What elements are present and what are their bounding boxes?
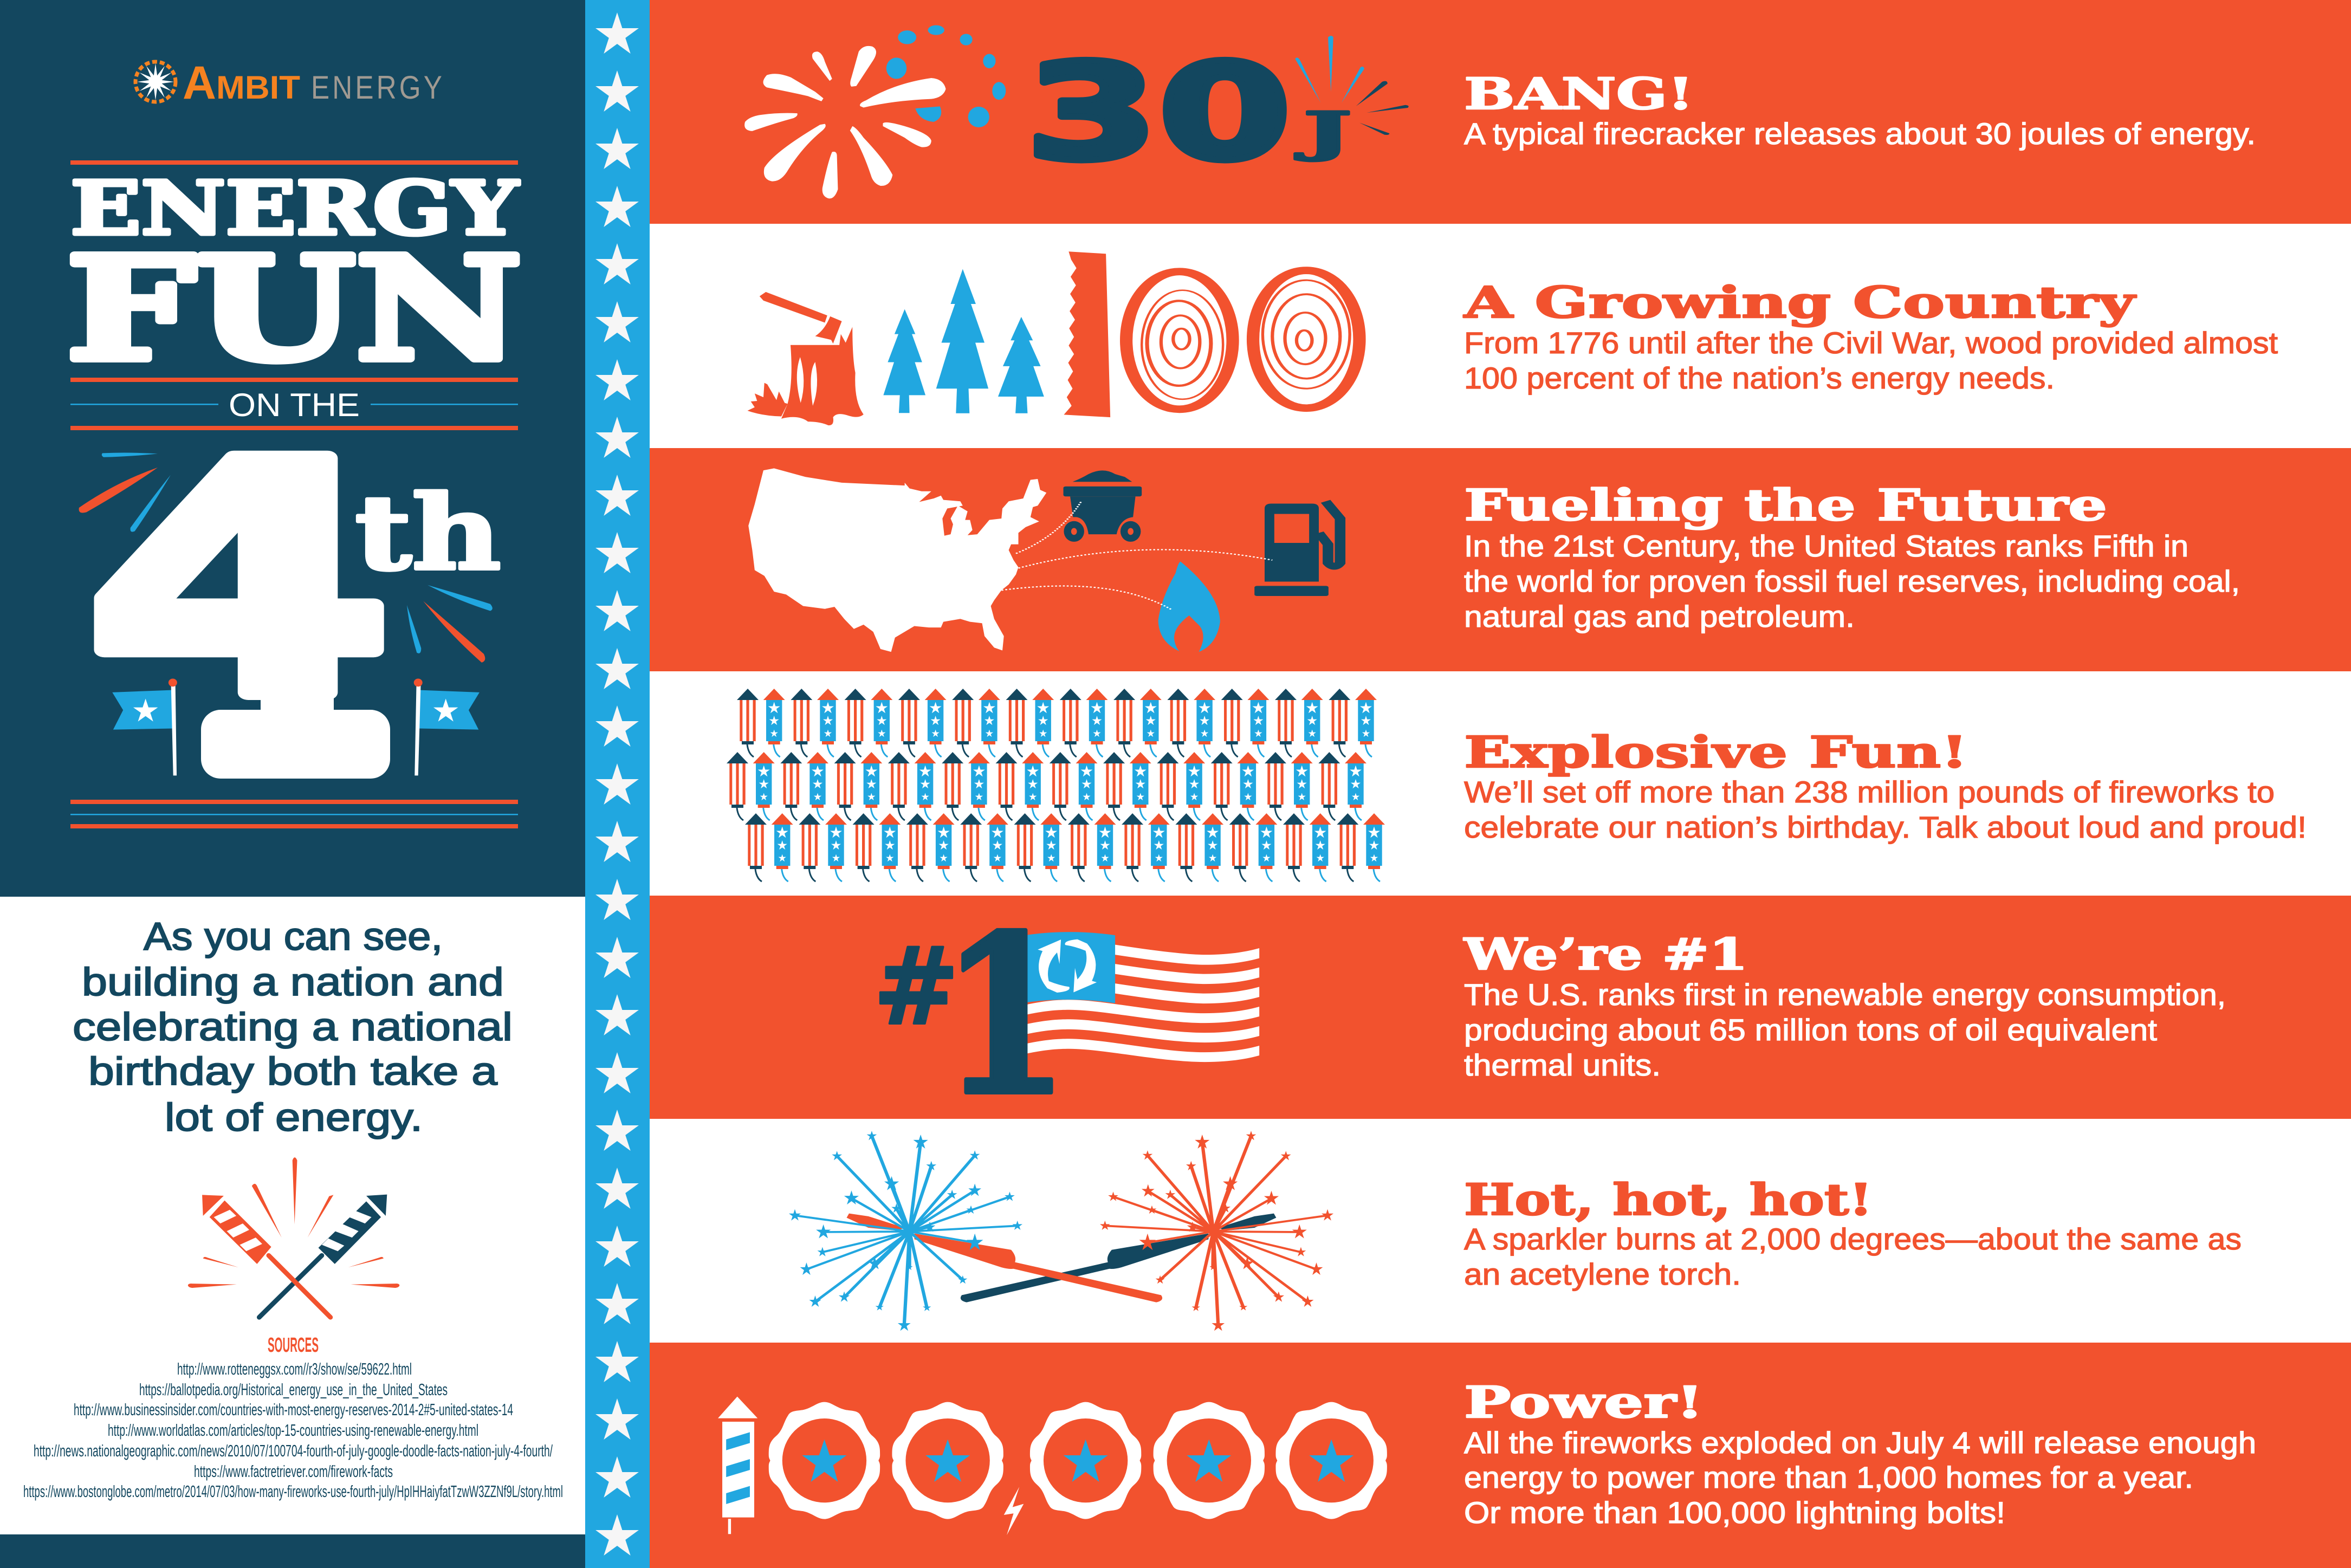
text: Fueling the Future: Fueling the Future [1464,480,2107,530]
illustration: flag with recycling arrows [1016,932,1259,1062]
icon: lightning bolt [1004,1487,1024,1535]
illustration: stump, trees, saw and log rings [747,251,1359,425]
text: Bang [1464,68,2256,151]
heading: FUN: FUN [66,225,522,392]
icon: US map [748,468,1046,652]
illustration: US map, coal cart, gas pump and flame [748,468,1340,652]
text: Hot, hot, hot: A sparkler burns at 2,000 degrees—about the same as [1464,1222,2242,1256]
heading: big 4: 4 [85,394,394,768]
heading: ENERGY: ENERGY [70,165,519,252]
logo: Ambit Energy: A [183,57,216,109]
sources list: https://www.bostonglobe.com/metro/2014/07/03/how-many-fireworks-use-fourth-july/HpIHHaiyfatTzwW3ZZNf9L/story.html [23,1482,563,1501]
icon: firecracker burst [744,25,1409,198]
number: #1: 1 [941,888,1070,1144]
star stripe [585,0,650,1568]
logo: Ambit Energy: MBIT [216,69,300,106]
icon: striped rocket [718,1397,757,1534]
icon: gas pump [1254,501,1340,596]
conclusion text [73,915,513,1139]
text: A Growing Country: A Growing Country [1463,277,2137,328]
conclusion text: birthday both take a [88,1050,498,1093]
text: Power: All the fireworks exploded on July 4 will release enough [1464,1426,2256,1460]
text: Power: Power! [1464,1377,1704,1428]
logo: Ambit Energy [135,57,445,109]
text: Bang: A typical firecracker releases about 30 joules of energy. [1464,116,2256,151]
panel: Fueling the Future [650,448,2351,671]
panel: Bang [650,0,2351,224]
heading: ON THE: ON THE [229,387,360,423]
conclusion text: lot of energy. [165,1096,423,1139]
sources list: SOURCES [268,1334,319,1357]
panel: conclusion and sources [0,897,585,1534]
text: Power [1464,1377,2256,1530]
conclusion text: building a nation and [82,961,504,1004]
text: Explosive Fun [1464,727,2307,844]
panel: Power [650,1343,2351,1568]
sources list: http://news.nationalgeographic.com/news/2010/07/100704-fourth-of-july-google-doodle-facts-nation-july-4-fourth/ [34,1441,553,1460]
text: Bang: BANG! [1464,68,1694,119]
text: We're #1: thermal units. [1464,1048,1661,1082]
text: Power: energy to power more than 1,000 homes for a year. [1464,1460,2193,1494]
text: We're #1 [1463,929,2226,1082]
icon: coal cart [1064,470,1142,542]
illustration: crossed sparklers [789,1131,1333,1331]
text: Fueling the Future [1464,480,2240,633]
number: 30 joules: 30 [1026,36,1291,190]
panel: Explosive Fun [650,671,2351,896]
text: A Growing Country [1463,277,2278,395]
sources list [23,1334,563,1501]
text: Power: Or more than 100,000 lightning bolts! [1464,1495,2005,1530]
sources list: https://www.factretriever.com/firework-facts [194,1462,393,1481]
orange sparks [1100,1131,1333,1331]
text: A Growing Country: From 1776 until after the Civil War, wood provided almost [1464,326,2278,360]
logo: Ambit Energy: ENERGY [311,69,445,106]
heading: th: th [355,472,501,593]
blue sparks [789,1131,1022,1331]
text: Fueling the Future: natural gas and petroleum. [1464,599,1855,633]
icon: crossed rockets [188,1157,399,1317]
text: A Growing Country: 100 percent of the nation’s energy needs. [1464,361,2055,395]
conclusion text: celebrating a national [73,1006,513,1049]
sources list: http://www.worldatlas.com/articles/top-15-countries-using-renewable-energy.html [108,1421,478,1440]
text: Explosive Fun: Explosive Fun! [1464,727,1968,777]
text: We're #1: producing about 65 million tons of oil equivalent [1464,1013,2157,1047]
text: Fueling the Future: the world for proven fossil fuel reserves, including coal, [1464,564,2240,598]
text: Hot, hot, hot [1464,1174,2242,1291]
text: We're #1: We’re #1 [1463,929,1748,980]
dotted connectors [1001,501,1272,610]
panel: Hot, hot, hot [650,1119,2351,1343]
number: #1 [873,888,1070,1144]
text: Explosive Fun: We’ll set off more than 238 million pounds of fireworks to [1464,775,2275,809]
panel: A Growing Country [650,224,2351,448]
sources list: https://ballotpedia.org/Historical_energy_use_in_the_United_States [139,1380,448,1399]
conclusion text: As you can see, [144,915,443,958]
number: #1: # [873,924,959,1049]
illustration: rows of rockets [727,689,1385,882]
illustration: rocket and star rings [718,1397,1387,1535]
text: Fueling the Future: In the 21st Century, the United States ranks Fifth in [1464,529,2188,563]
sources list: http://www.businessinsider.com/countries-with-most-energy-reserves-2014-2#5-united-states-14 [74,1400,513,1419]
text: Explosive Fun: celebrate our nation’s birthday. Talk about loud and proud! [1464,810,2307,844]
text: Hot, hot, hot: Hot, hot, hot! [1464,1174,1873,1225]
sources list: http://www.rotteneggsx.com//r3/show/se/59622.html [177,1359,412,1378]
icon: gas flame [1158,561,1220,652]
panel: title [0,0,585,897]
text: Hot, hot, hot: an acetylene torch. [1464,1257,1741,1291]
text: We're #1: The U.S. ranks first in renewable energy consumption, [1464,977,2226,1012]
number: 30 joules [1026,36,1352,190]
firework rays and flags [79,453,493,775]
number: 30 joules: J [1294,101,1352,163]
panel: We're #1 [650,888,2351,1144]
